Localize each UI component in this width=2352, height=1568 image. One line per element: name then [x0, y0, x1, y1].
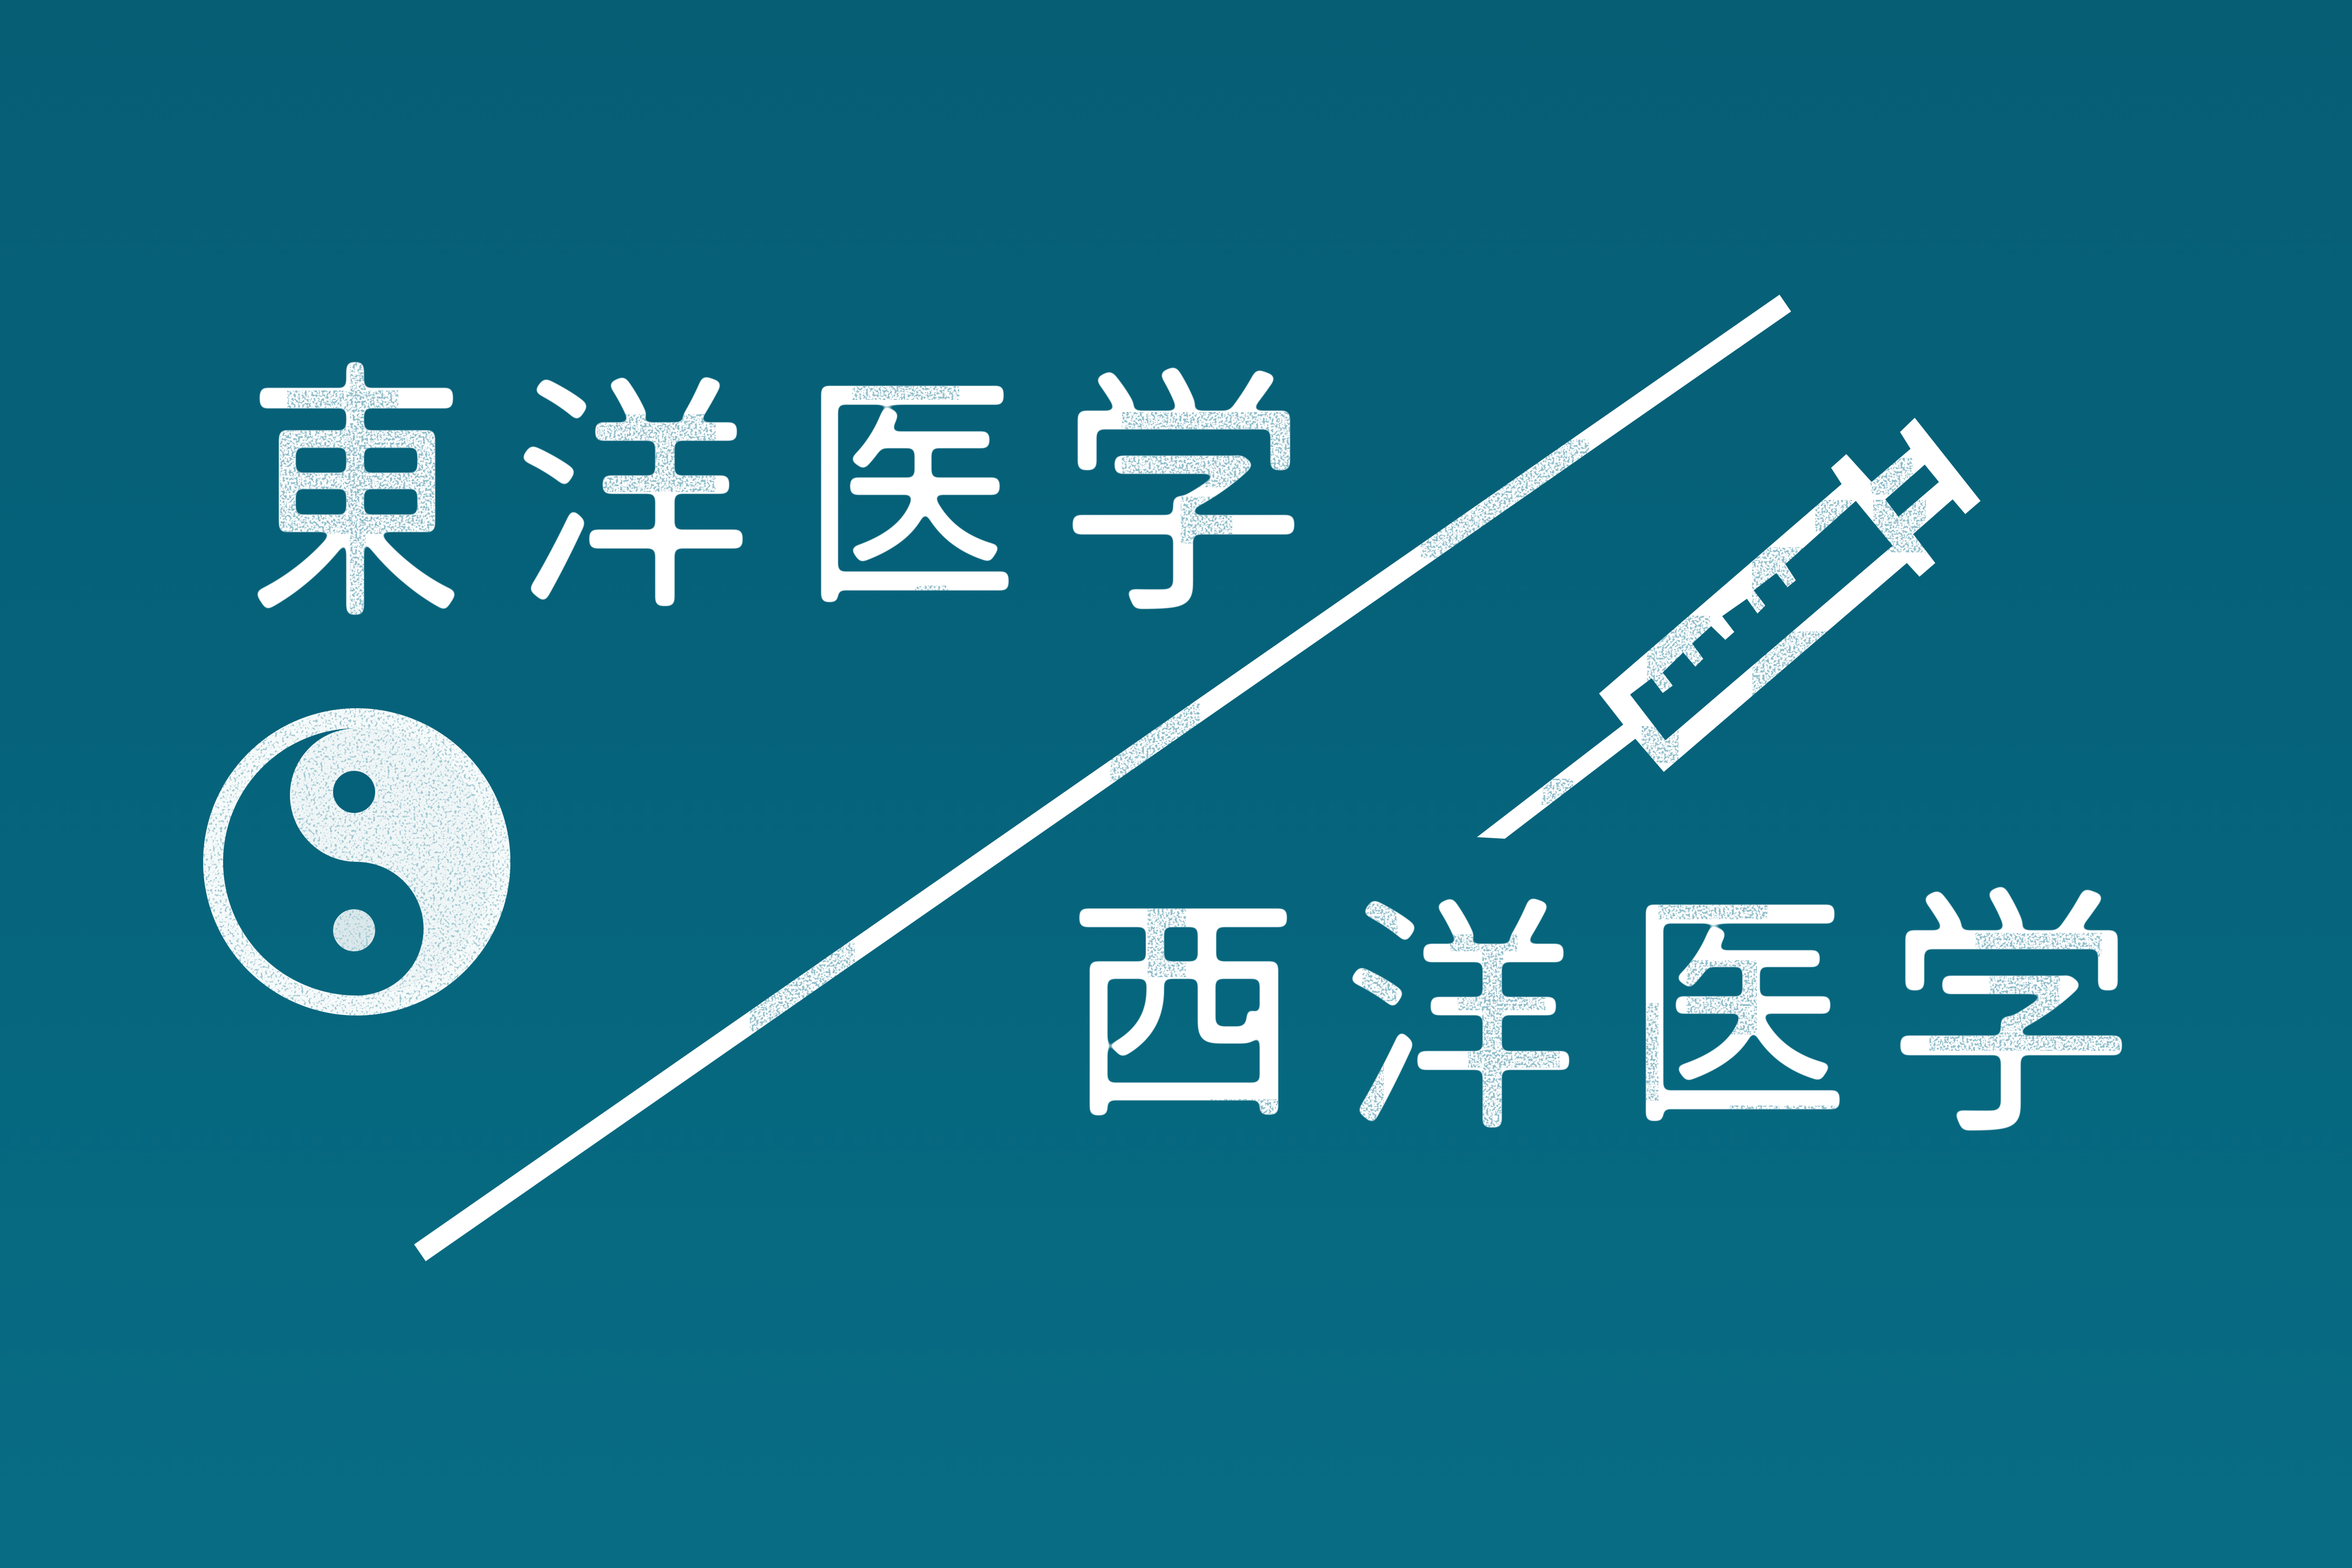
character 学: 学	[1058, 351, 1308, 643]
yin yang light half	[290, 728, 490, 996]
character 洋: 洋	[1341, 881, 1578, 1160]
icon: yin yang	[203, 708, 510, 1016]
yin yang outer ring	[203, 708, 510, 1016]
character 東: 東	[246, 345, 466, 651]
character 医: 医	[1625, 875, 1850, 1154]
character 西: 西	[1066, 878, 1301, 1148]
icon: syringe	[1477, 418, 1981, 839]
diagonal divider line	[414, 295, 1791, 1261]
heading: eastern medicine	[246, 345, 1308, 651]
character 医: 医	[801, 357, 1019, 635]
heading: western medicine	[1066, 870, 2135, 1165]
character 学: 学	[1886, 870, 2135, 1165]
yin yang light dot	[333, 909, 375, 951]
yin yang dark dot	[333, 771, 375, 813]
character 洋: 洋	[512, 360, 752, 639]
